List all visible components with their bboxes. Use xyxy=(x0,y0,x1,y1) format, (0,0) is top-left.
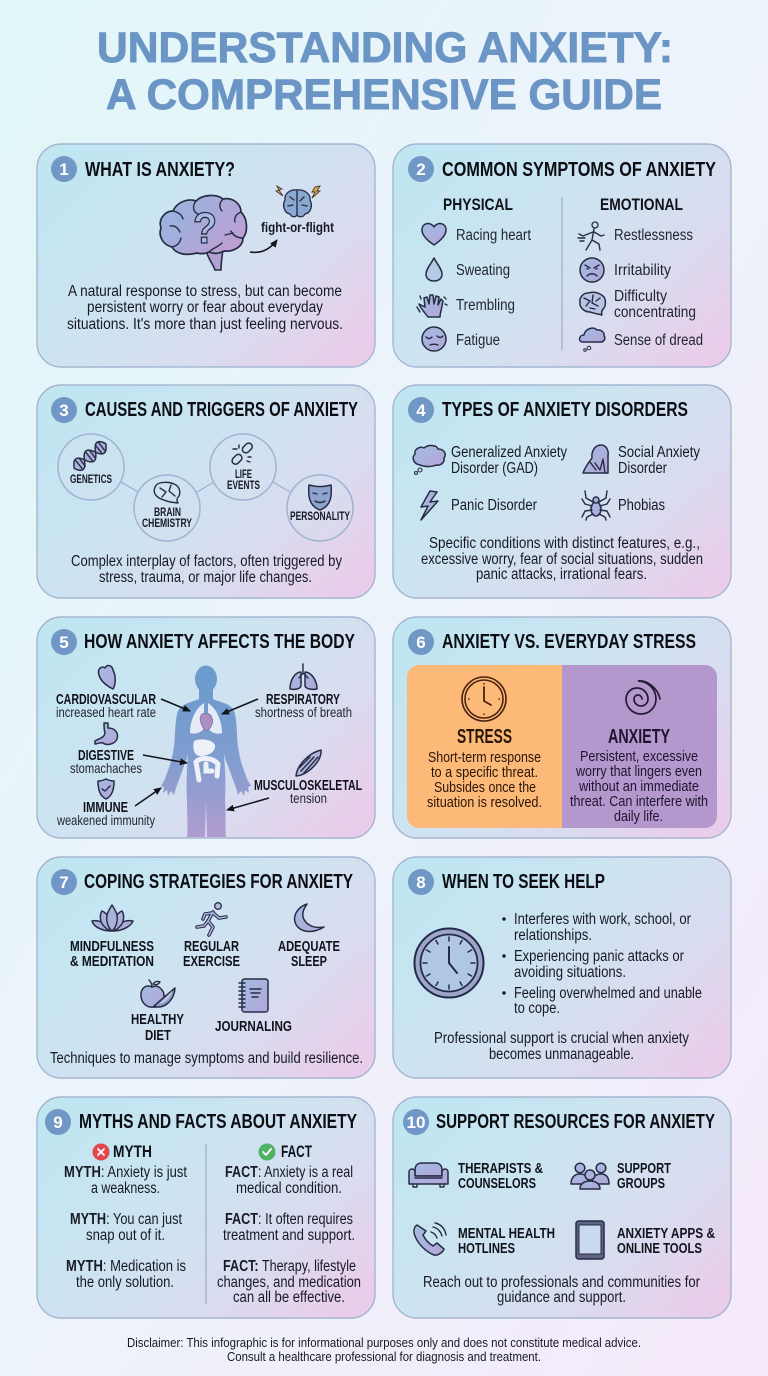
bullet list: warning signs: to cope. xyxy=(514,1000,560,1017)
badge 2 xyxy=(408,156,434,182)
text block: causes summary: stress, trauma, or major life changes. xyxy=(99,569,312,586)
column: myths: the only solution. xyxy=(76,1274,174,1291)
strategy: adequate sleep: ADEQUATE xyxy=(278,939,340,955)
text block: types summary: panic attacks, irrational fears. xyxy=(476,566,647,583)
item: restlessness xyxy=(578,222,693,250)
label: musculoskeletal xyxy=(254,750,362,806)
comparison: anxiety column: worry that lingers even xyxy=(575,763,702,780)
column: myths: snap out of it. xyxy=(86,1227,165,1244)
column: myths: MYTH: Anxiety is just xyxy=(64,1164,188,1181)
panel: types of anxiety disorders xyxy=(393,385,731,598)
cause: life events: LIFE xyxy=(235,467,252,481)
text block: seek help summary: Professional support is crucial when anxiety xyxy=(434,1030,689,1047)
cause: personality xyxy=(287,475,353,541)
panel: coping strategies xyxy=(37,857,375,1078)
text block: definition: situations. It's more than just feeling nervous. xyxy=(67,316,343,333)
badge 1 xyxy=(51,156,77,182)
badge 9 xyxy=(45,1109,71,1135)
cause: personality: PERSONALITY xyxy=(290,509,350,523)
item: restlessness: Restlessness xyxy=(614,227,693,244)
arrow: digestive to stomach xyxy=(143,755,187,763)
resource: apps and online tools: ANXIETY APPS & xyxy=(617,1226,715,1242)
comparison: anxiety column xyxy=(562,665,717,828)
label: immune xyxy=(56,779,155,828)
bullet list: warning signs: Feeling overwhelmed and unable xyxy=(514,985,702,1002)
column: facts: FACT: Therapy, lifestyle xyxy=(223,1258,356,1275)
badge 3 xyxy=(51,397,77,423)
bullet list: warning signs: Interferes with work, school, or xyxy=(514,911,691,928)
strategy: healthy diet: DIET xyxy=(145,1028,171,1044)
item: trembling xyxy=(417,295,515,317)
cause: life events xyxy=(210,434,276,500)
column: facts: treatment and support. xyxy=(223,1227,355,1244)
panel: anxiety vs everyday stress xyxy=(393,617,731,838)
icon: brain with question mark xyxy=(160,195,247,270)
column: myths xyxy=(64,1142,188,1291)
strategy: mindfulness and meditation: & MEDITATION xyxy=(70,954,154,970)
panel: support resources xyxy=(393,1097,731,1318)
icon: brain with question mark: ? xyxy=(193,204,217,253)
text block: seek help summary xyxy=(434,1030,689,1063)
text block: definition: A natural response to stress, but can become xyxy=(68,283,342,300)
subheading: emotional: EMOTIONAL xyxy=(600,195,683,214)
bullet list: warning signs xyxy=(502,911,702,1017)
arrow: respiratory to lungs xyxy=(222,699,258,714)
comparison: anxiety column: daily life. xyxy=(614,808,663,825)
label: digestive: stomachaches xyxy=(70,760,142,776)
badge 10 xyxy=(403,1109,429,1135)
human body figure xyxy=(161,666,251,837)
text block: support summary: Reach out to professionals and communities for xyxy=(423,1274,700,1291)
text block: types summary: excessive worry, fear of social situations, sudden xyxy=(421,551,703,568)
arrow: musculoskeletal to leg xyxy=(227,798,269,810)
strategy: regular exercise: REGULAR xyxy=(184,939,240,955)
column: myths: a weakness. xyxy=(91,1180,160,1197)
panel: how anxiety affects the body xyxy=(37,617,375,838)
icon: wall clock xyxy=(414,928,484,998)
column: myths: MYTH: You can just xyxy=(70,1211,183,1228)
resource: apps and online tools: ONLINE TOOLS xyxy=(617,1241,702,1257)
badge 2: 2 xyxy=(416,160,426,179)
item: panic disorder xyxy=(421,491,537,520)
resource: support groups: SUPPORT xyxy=(617,1161,671,1177)
disclaimer: Consult a healthcare professional for diagnosis and treatment. xyxy=(227,1349,541,1364)
comparison: stress column: to a specific threat. xyxy=(431,764,538,781)
comparison: stress column: Subsides once the xyxy=(434,779,536,796)
comparison: anxiety column: ANXIETY xyxy=(608,726,670,748)
item: fatigue xyxy=(422,327,500,351)
resource: therapists and counselors: COUNSELORS xyxy=(458,1176,536,1192)
heading: when to seek help: WHEN TO SEEK HELP xyxy=(442,870,605,893)
column: facts: changes, and medication xyxy=(217,1274,361,1291)
badge 4 xyxy=(408,397,434,423)
panel: myths and facts xyxy=(37,1097,375,1318)
item: social anxiety disorder: Social Anxiety xyxy=(618,444,700,461)
strategy: mindfulness and meditation: MINDFULNESS xyxy=(70,939,154,955)
text block: support summary xyxy=(423,1274,700,1306)
item: generalized anxiety disorder: Disorder (GAD) xyxy=(451,460,538,477)
title: A COMPREHENSIVE GUIDE xyxy=(106,71,662,119)
label: immune: IMMUNE xyxy=(83,800,128,816)
cause: genetics: GENETICS xyxy=(70,472,112,486)
text block: causes summary: Complex interplay of factors, often triggered by xyxy=(71,553,342,570)
text block: support summary: guidance and support. xyxy=(497,1289,626,1306)
cause: genetics xyxy=(58,434,124,500)
comparison: stress column: situation is resolved. xyxy=(427,794,542,811)
badge 6: 6 xyxy=(416,633,426,652)
arrow: cardiovascular to chest xyxy=(161,699,190,711)
disclaimer: Disclaimer: This infographic is for informational purposes only and does not constitute medical advice. xyxy=(127,1335,641,1350)
item: irritability xyxy=(580,258,671,282)
strategy: journaling: JOURNALING xyxy=(215,1019,292,1035)
badge 10: 10 xyxy=(406,1113,426,1132)
item: sense of dread xyxy=(580,328,703,351)
text block: definition xyxy=(67,283,343,333)
item: social anxiety disorder xyxy=(583,444,700,477)
item: sweating xyxy=(426,258,510,281)
resource: support groups: GROUPS xyxy=(617,1176,665,1192)
strategy: regular exercise xyxy=(183,903,240,970)
column: myths: MYTH: Medication is xyxy=(66,1258,186,1275)
label: respiratory xyxy=(255,664,352,720)
item: panic disorder: Panic Disorder xyxy=(451,497,537,514)
label: musculoskeletal: MUSCULOSKELETAL xyxy=(254,778,362,794)
cause: brain chemistry: CHEMISTRY xyxy=(142,516,192,530)
resource: therapists and counselors xyxy=(409,1161,543,1192)
resource: mental health hotlines: HOTLINES xyxy=(458,1241,515,1257)
label: cardiovascular xyxy=(56,666,156,720)
text block: definition: persistent worry or fear about everyday xyxy=(87,299,323,316)
badge 5: 5 xyxy=(59,633,69,652)
panel: what is anxiety xyxy=(37,144,375,367)
column: facts: medical condition. xyxy=(236,1180,342,1197)
heading: anxiety vs stress: ANXIETY VS. EVERYDAY STRESS xyxy=(442,630,696,653)
comparison: stress column xyxy=(407,665,562,828)
resource: therapists and counselors: THERAPISTS & xyxy=(458,1161,543,1177)
text block: seek help summary: becomes unmanageable. xyxy=(489,1046,634,1063)
strategy: healthy diet: HEALTHY xyxy=(131,1012,184,1028)
label: cardiovascular: increased heart rate xyxy=(56,704,156,720)
comparison: anxiety column: Persistent, excessive xyxy=(580,748,698,765)
heading: coping strategies: COPING STRATEGIES FOR ANXIETY xyxy=(84,870,353,893)
bullet list: warning signs: relationships. xyxy=(514,927,592,944)
badge 8: 8 xyxy=(416,873,426,892)
resource: mental health hotlines xyxy=(414,1223,555,1257)
panel: causes and triggers xyxy=(37,385,375,598)
item: difficulty concentrating: Difficulty xyxy=(614,288,667,305)
disclaimer xyxy=(127,1335,641,1364)
text block: coping summary: Techniques to manage symptoms and build resilience. xyxy=(50,1050,363,1067)
item: phobias xyxy=(582,491,665,520)
resource: apps and online tools xyxy=(576,1221,715,1259)
strategy: adequate sleep: SLEEP xyxy=(291,954,327,970)
label: immune: weakened immunity xyxy=(56,812,155,828)
title xyxy=(97,24,673,119)
column: facts xyxy=(217,1142,361,1306)
badge 4: 4 xyxy=(416,401,426,420)
strategy: regular exercise: EXERCISE xyxy=(183,954,240,970)
cause: brain chemistry xyxy=(134,475,200,541)
heading: what is anxiety: WHAT IS ANXIETY? xyxy=(85,158,235,181)
column: facts: can all be effective. xyxy=(233,1289,345,1306)
badge 8 xyxy=(408,869,434,895)
heading: myths and facts: MYTHS AND FACTS ABOUT ANXIETY xyxy=(79,1110,357,1133)
icon: green check xyxy=(258,1144,276,1160)
item: difficulty concentrating: concentrating xyxy=(614,304,696,321)
arrow: brain to fight-or-flight xyxy=(250,240,277,252)
badge 7 xyxy=(51,869,77,895)
item: generalized anxiety disorder: Generalized Anxiety xyxy=(451,444,567,461)
item: racing heart xyxy=(422,224,532,245)
title: UNDERSTANDING ANXIETY: xyxy=(97,24,673,72)
item: social anxiety disorder: Disorder xyxy=(618,460,667,477)
text block: causes summary xyxy=(71,553,342,586)
panel: when to seek help xyxy=(393,857,731,1078)
label: cardiovascular: CARDIOVASCULAR xyxy=(56,692,156,708)
heading: body effects: HOW ANXIETY AFFECTS THE BODY xyxy=(84,630,355,653)
resource: mental health hotlines: MENTAL HEALTH xyxy=(458,1226,555,1242)
item: fatigue: Fatigue xyxy=(456,332,500,349)
text block: types summary: Specific conditions with distinct features, e.g., xyxy=(429,535,700,552)
column: facts: FACT xyxy=(281,1142,312,1161)
badge 1: 1 xyxy=(59,160,69,179)
cause: life events: EVENTS xyxy=(227,478,260,492)
badge 7: 7 xyxy=(59,873,69,892)
label: digestive: DIGESTIVE xyxy=(78,748,134,764)
cause: brain chemistry: BRAIN xyxy=(154,505,181,519)
item: sense of dread: Sense of dread xyxy=(614,332,703,349)
item: phobias: Phobias xyxy=(618,497,665,514)
item: difficulty concentrating xyxy=(580,288,696,321)
label: fight-or-flight: fight-or-flight xyxy=(261,219,334,235)
comparison: anxiety column: threat. Can interfere with xyxy=(570,793,708,810)
icon: spiral xyxy=(626,681,660,714)
heading: types of disorders: TYPES OF ANXIETY DISORDERS xyxy=(442,398,688,421)
strategy: healthy diet xyxy=(131,980,184,1044)
label: digestive xyxy=(70,723,142,776)
resource: support groups xyxy=(571,1161,671,1192)
panel: common symptoms xyxy=(393,144,731,367)
badge 6 xyxy=(408,629,434,655)
badge 3: 3 xyxy=(59,401,69,420)
item: generalized anxiety disorder xyxy=(413,444,567,477)
label: respiratory: shortness of breath xyxy=(255,704,352,720)
subheading: physical: PHYSICAL xyxy=(443,195,513,214)
icon: clock outline xyxy=(462,677,506,721)
column: facts: FACT: It often requires xyxy=(225,1211,353,1228)
column: myths: MYTH xyxy=(113,1142,152,1161)
label: respiratory: RESPIRATORY xyxy=(266,692,340,708)
bullet list: warning signs: Experiencing panic attacks or xyxy=(514,948,684,965)
arrow: immune to body xyxy=(135,788,161,806)
bullet list: warning signs: avoiding situations. xyxy=(514,964,626,981)
strategy: adequate sleep xyxy=(278,904,340,970)
text block: types summary xyxy=(421,535,703,583)
strategy: mindfulness and meditation xyxy=(70,905,154,970)
item: sweating: Sweating xyxy=(456,262,510,279)
item: irritability: Irritability xyxy=(614,262,671,279)
column: facts: FACT: Anxiety is a real xyxy=(225,1164,353,1181)
label: musculoskeletal: tension xyxy=(290,790,327,806)
comparison: stress column: STRESS xyxy=(457,726,512,748)
comparison: stress column: Short-term response xyxy=(428,749,541,766)
strategy: journaling xyxy=(215,979,292,1035)
heading: causes and triggers: CAUSES AND TRIGGERS OF ANXIETY xyxy=(85,398,358,421)
item: racing heart: Racing heart xyxy=(456,227,532,244)
icon: small brain with bolts xyxy=(276,186,320,217)
comparison: anxiety column: without an immediate xyxy=(578,778,699,795)
badge 5 xyxy=(51,629,77,655)
badge 9: 9 xyxy=(53,1113,63,1132)
icon: red cross xyxy=(92,1144,110,1160)
item: trembling: Trembling xyxy=(456,297,515,314)
